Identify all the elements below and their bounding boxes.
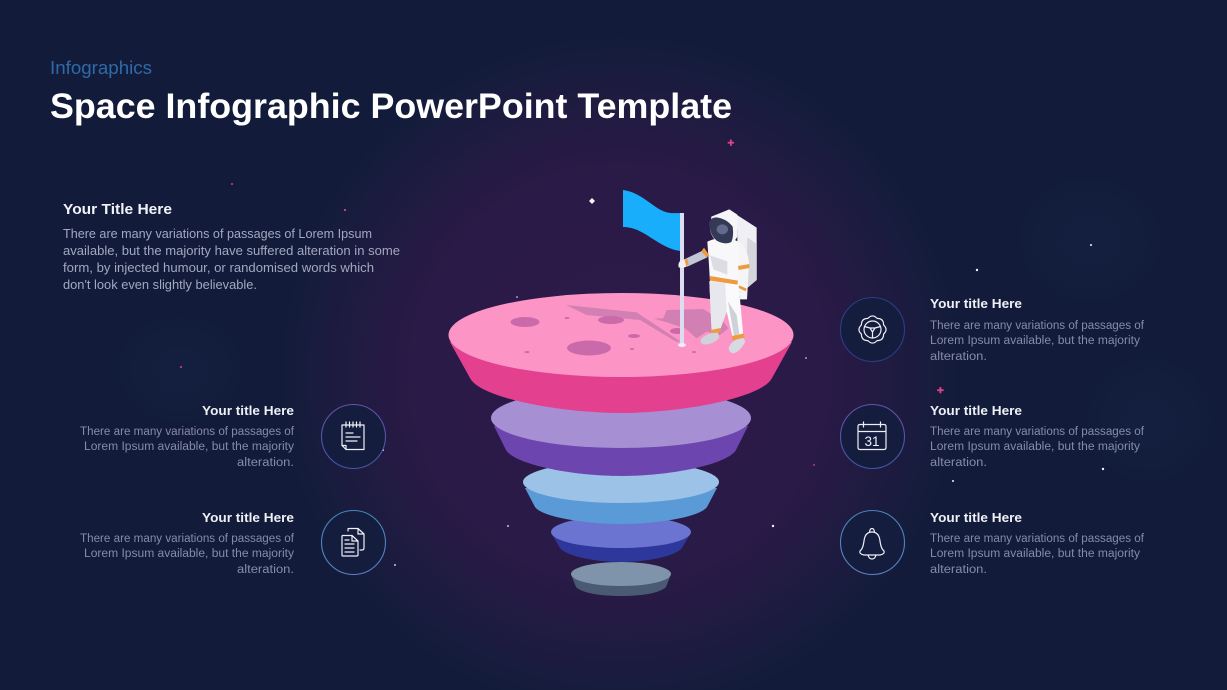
funnel: moon tiers: [448, 293, 794, 596]
item: calendar (right): There are many variations of passages of: [930, 426, 1145, 438]
item: documents (left): Your title Here: [202, 510, 294, 525]
item: notes (left): Your title Here: [202, 403, 294, 418]
text block: intro: available, but the majority have suffered alteration in some: [63, 244, 400, 258]
text block: intro: There are many variations of passages of Lorem Ipsum: [63, 227, 372, 241]
title: Space Infographic PowerPoint Template: [50, 87, 732, 126]
item: notes (left): alteration.: [237, 457, 294, 469]
item: calendar (right): [840, 403, 1145, 469]
text block: intro: Your Title Here: [63, 202, 172, 218]
icon: documents: [322, 510, 386, 574]
item: notes (left): Lorem Ipsum available, but the majority: [84, 441, 294, 453]
suit bands: [710, 276, 738, 285]
item: calendar (right): alteration.: [930, 457, 987, 469]
text block: intro: don't look even slightly believable.: [63, 278, 257, 292]
item: documents (left): Lorem Ipsum available, but the majority: [84, 548, 294, 560]
item: bell (right): [840, 510, 1145, 576]
flag: [623, 190, 686, 347]
icon: calendar: [840, 404, 904, 468]
item: notes (left): [80, 403, 386, 469]
item: bell (right): Lorem Ipsum available, but the majority: [930, 548, 1140, 560]
item: gear (right): There are many variations of passages of: [930, 320, 1145, 332]
item: gear (right): Your title Here: [930, 296, 1022, 311]
boots: [701, 333, 719, 345]
item: documents (left): There are many variations of passages of: [80, 533, 295, 545]
moon shadow: [566, 305, 728, 342]
icon: bell: [840, 510, 904, 574]
legs: [709, 281, 743, 337]
tier 2: purple: [491, 388, 751, 476]
item: documents (left): alteration.: [237, 564, 294, 576]
helmet: [710, 209, 737, 245]
stars: [180, 140, 1104, 566]
item: calendar (right): Your title Here: [930, 403, 1022, 418]
text block: intro: [63, 202, 400, 292]
tier 3: blue: [523, 461, 719, 524]
icon: notepad: [322, 404, 386, 468]
item: documents (left): [80, 510, 386, 576]
tier 4: indigo: [551, 516, 691, 562]
item: gear (right): [840, 296, 1145, 363]
text block: intro: form, by injected humour, or randomised words which: [63, 261, 374, 275]
tier 1: pink moon: [448, 293, 794, 413]
item: gear (right): Lorem Ipsum available, but the majority: [930, 335, 1140, 347]
astronaut: [678, 209, 757, 353]
raised arm: [680, 251, 707, 267]
item: bell (right): alteration.: [930, 564, 987, 576]
tier 5: grey: [571, 562, 671, 596]
torso: [707, 238, 749, 287]
item: gear (right): alteration.: [930, 351, 987, 363]
item: notes (left): There are many variations of passages of: [80, 426, 295, 438]
subtitle: Infographics: [50, 57, 152, 78]
item: bell (right): There are many variations of passages of: [930, 533, 1145, 545]
item: calendar (right): Lorem Ipsum available, but the majority: [930, 441, 1140, 453]
item: bell (right): Your title Here: [930, 510, 1022, 525]
backpack: [728, 209, 757, 289]
icon: calendar: 31: [864, 434, 880, 449]
icon: gear: [840, 298, 904, 362]
craters: [510, 316, 696, 356]
